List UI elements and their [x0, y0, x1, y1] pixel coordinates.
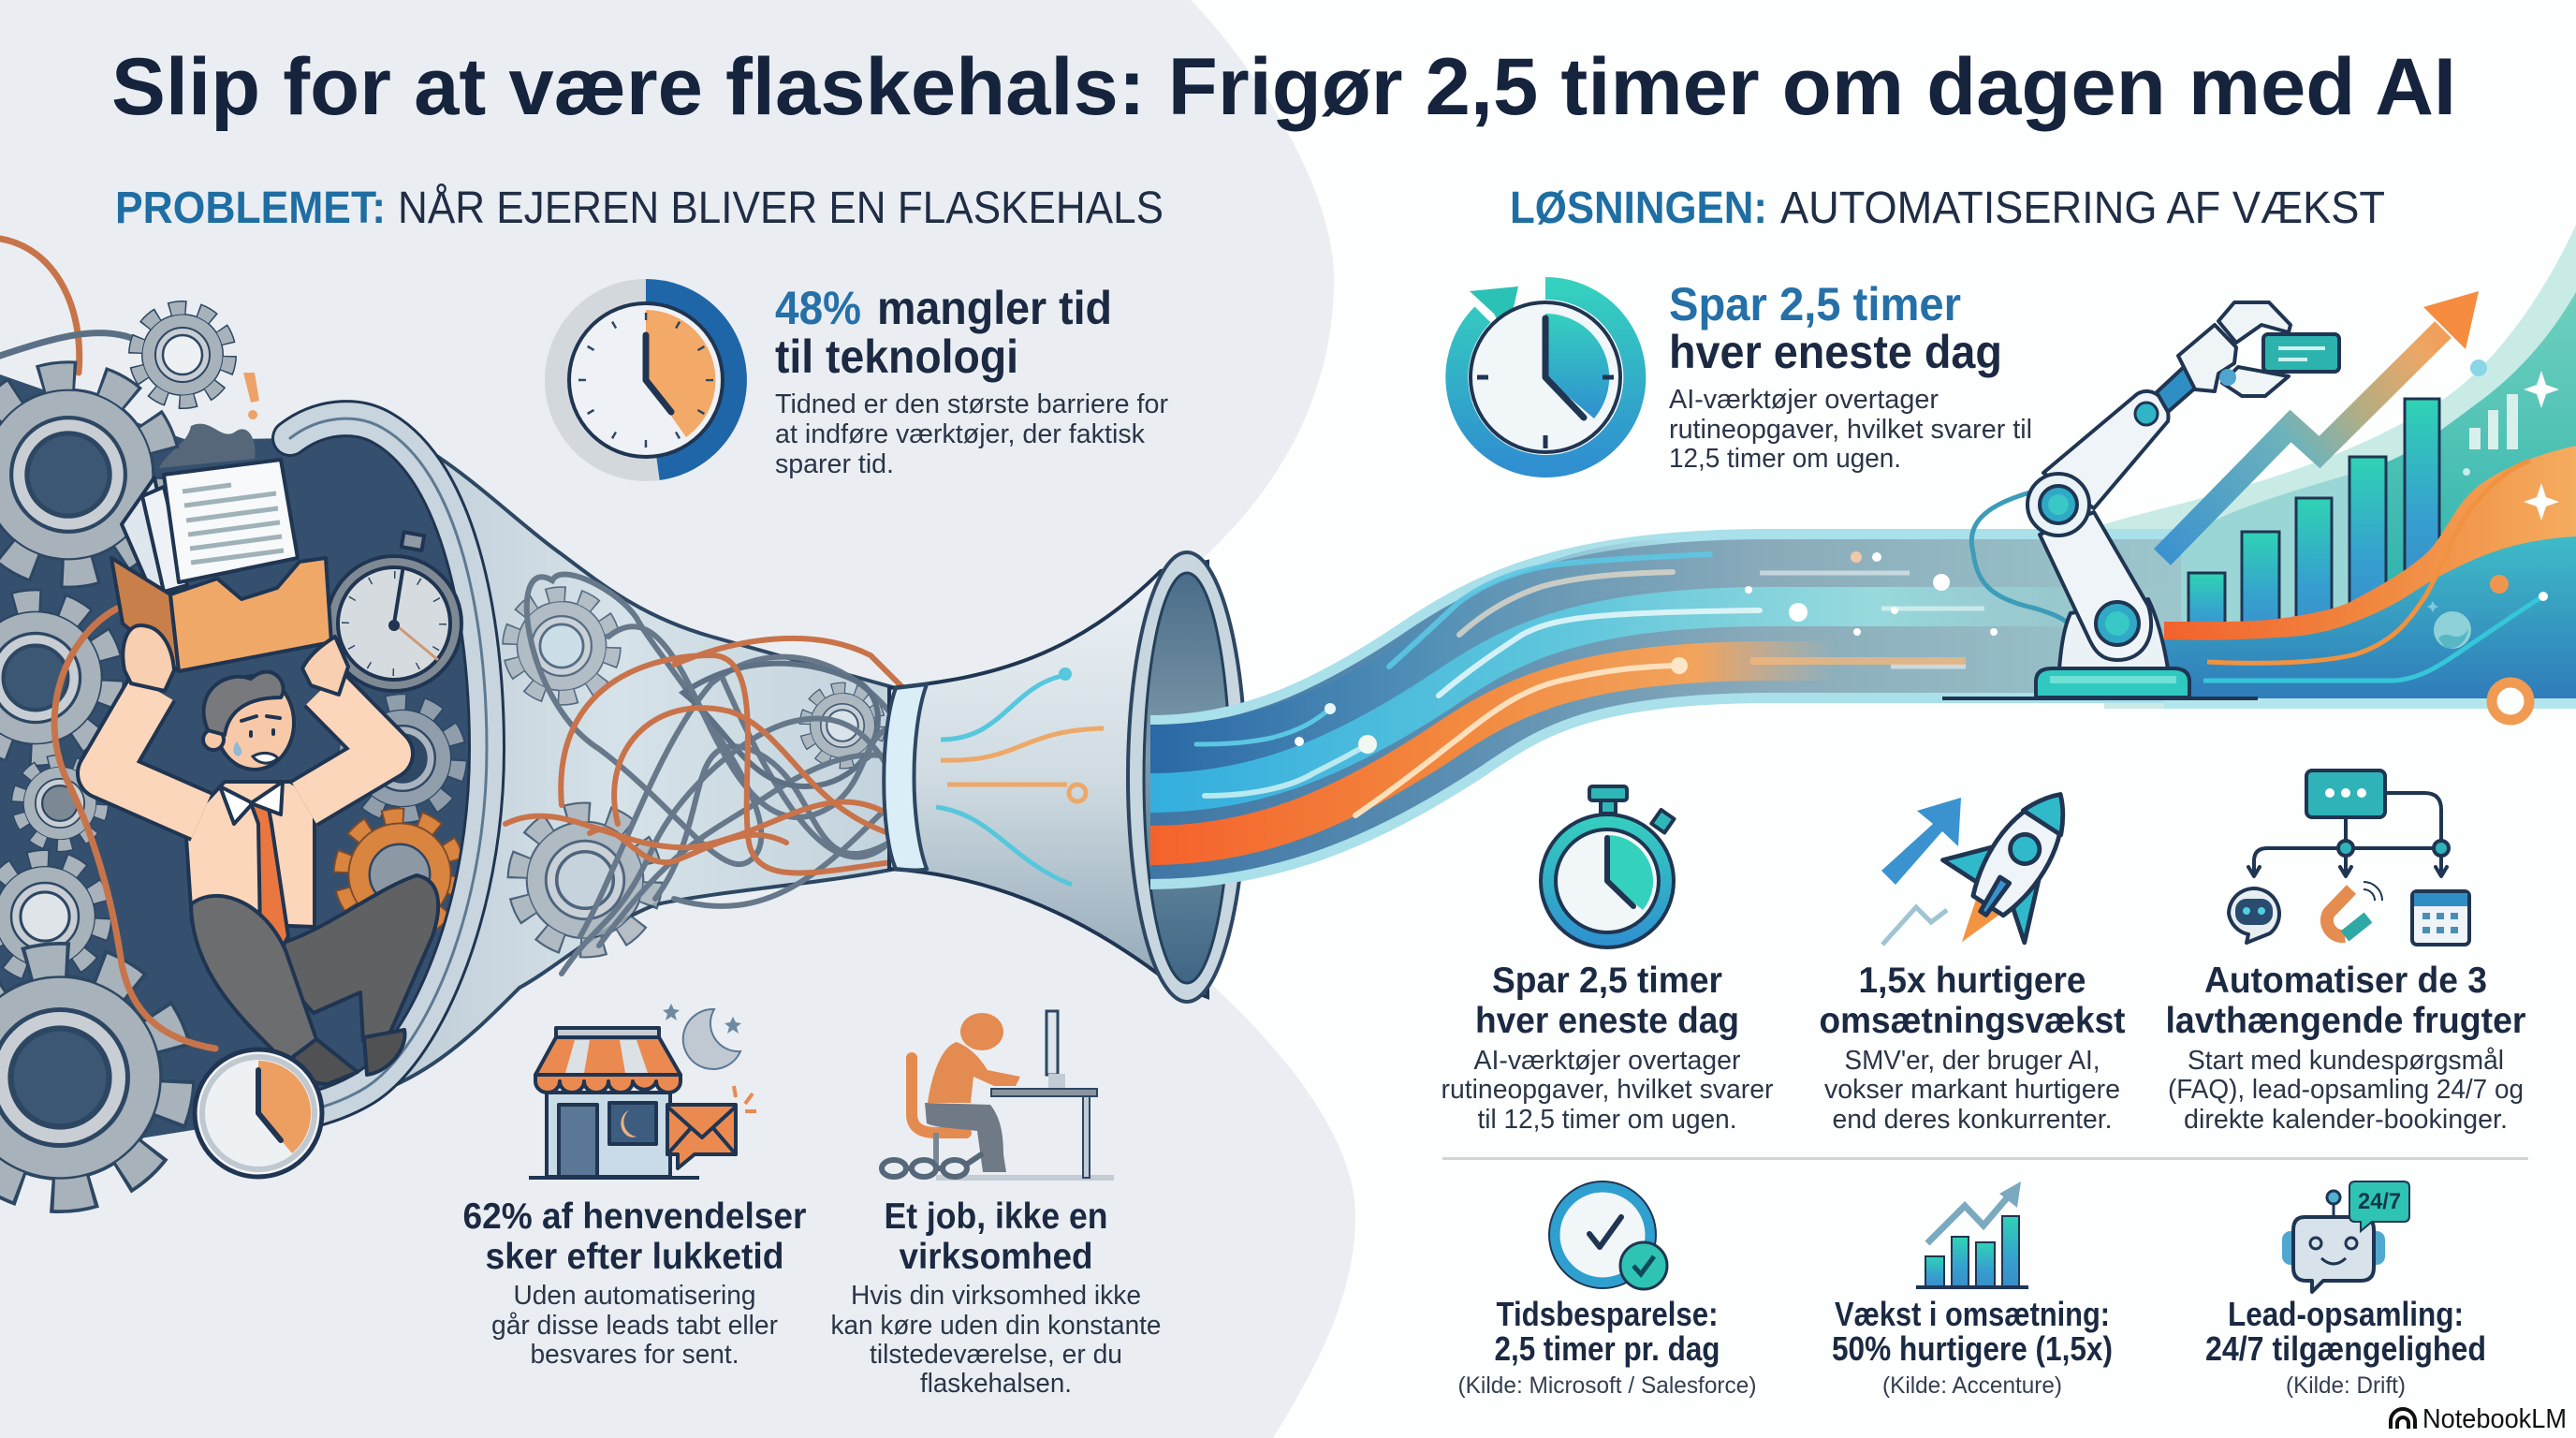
- stat text: et job: flaskehalsen.: [920, 1369, 1072, 1399]
- stat text: 62%: besvares for sent.: [530, 1340, 739, 1370]
- stat text: 62%: [462, 1196, 807, 1370]
- text: Lead-opsamling:: [2228, 1295, 2464, 1333]
- heading: solution: AUTOMATISERING AF VÆKST: [1780, 183, 2385, 233]
- stat text: save time: 12,5 timer om ugen.: [1669, 444, 1901, 474]
- ring: [2492, 682, 2529, 720]
- stat text: 48%: mangler tid: [877, 282, 1112, 334]
- gear: bottom: [0, 961, 177, 1195]
- heading: solution: LØSNINGEN:: [1510, 183, 1767, 233]
- stat text: save time: Spar 2,5 timer: [1669, 278, 1961, 330]
- text: 2,5 timer pr. dag: [1494, 1329, 1720, 1368]
- stat text: 48%: [775, 282, 1168, 479]
- papers: [122, 460, 298, 599]
- text: til 12,5 timer om ugen.: [1477, 1105, 1737, 1135]
- text: Vækst i omsætning:: [1835, 1295, 2110, 1333]
- card: automatiser: [2166, 770, 2525, 1135]
- icon: automation flow: [2229, 770, 2469, 945]
- stat: save time clock: [1456, 286, 1634, 466]
- bottom clock: [195, 1049, 322, 1177]
- text: lavthængende frugter: [2166, 1001, 2525, 1041]
- gear: in cone upper: [510, 594, 613, 697]
- torso: [185, 782, 315, 927]
- text: vokser markant hurtigere: [1824, 1075, 2120, 1105]
- stat text: save time: AI-værktøjer overtager: [1669, 385, 1939, 415]
- stream ribbon: [1150, 554, 2181, 845]
- growth arrow: [2162, 291, 2479, 557]
- text: (Kilde: Accenture): [1882, 1372, 2062, 1399]
- stat text: et job: Hvis din virksomhed ikke: [851, 1281, 1141, 1311]
- robot arm: [1942, 302, 2339, 698]
- gear: orange inside: [342, 816, 458, 932]
- text: omsætningsvækst: [1820, 1001, 2126, 1041]
- arms: [103, 688, 388, 816]
- cable: orange around man: [54, 609, 215, 1049]
- text: rutineopgaver, hvilket svarer: [1442, 1075, 1774, 1105]
- text: Spar 2,5 timer: [1492, 961, 1722, 1001]
- stat: chained worker icon: [882, 1011, 1114, 1178]
- right leg: [271, 875, 438, 1047]
- solution funnel flare: [884, 552, 1246, 1002]
- stat text: 48%: Tidned er den største barriere for: [775, 389, 1168, 419]
- gear: large upper: [0, 376, 167, 573]
- icon: clock check: [1549, 1181, 1667, 1289]
- stat text: 62%: går disse leads tabt eller: [491, 1311, 778, 1341]
- stat text: et job: kan køre uden din konstante: [831, 1311, 1161, 1341]
- gear: dark inside: [346, 702, 459, 814]
- heading: problem: PROBLEMET:: [115, 183, 386, 233]
- icon: rocket: [1881, 760, 2102, 971]
- stat text: 48%: 48%: [775, 282, 861, 334]
- text: SMV'er, der bruger AI,: [1844, 1046, 2100, 1076]
- text: end deres konkurrenter.: [1833, 1105, 2112, 1135]
- gear: in neck: [805, 688, 880, 763]
- gear: lower small: [18, 761, 102, 845]
- head: [203, 672, 294, 824]
- text: Automatiser de 3: [2204, 961, 2487, 1001]
- stat: 62% shop icon: [529, 1004, 756, 1178]
- stat text: et job: tilstedeværelse, er du: [870, 1340, 1122, 1370]
- pale strip under chart: [2164, 698, 2576, 709]
- gear: small top: [136, 308, 229, 402]
- bar chart: [2188, 399, 2439, 643]
- text: [2166, 961, 2525, 1135]
- stopwatch: [327, 532, 461, 691]
- card: hurtigere vækst: [1820, 760, 2126, 1135]
- stat text: 48%: at indføre værktøjer, der faktisk: [775, 419, 1145, 449]
- text: hver eneste dag: [1475, 1001, 1739, 1041]
- metric: vækst: [1832, 1181, 2113, 1399]
- right shoe: [364, 1030, 404, 1075]
- text: [1832, 1295, 2113, 1399]
- stat text: 48%: sparer tid.: [775, 449, 894, 479]
- icon: chatbot: [2282, 1181, 2409, 1292]
- stat text: 62%: sker efter lukketid: [485, 1237, 784, 1277]
- hands: [123, 625, 348, 695]
- panel: problem background: [0, 0, 1355, 1438]
- alert mark: [243, 373, 259, 419]
- stat text: save time: [1669, 278, 2032, 474]
- text: (Kilde: Drift): [2286, 1372, 2406, 1399]
- left leg: [191, 896, 316, 1063]
- gear: lower: [0, 858, 103, 975]
- text: AI-værktøjer overtager: [1473, 1046, 1741, 1076]
- text: [1820, 961, 2126, 1135]
- tangled cables: [505, 575, 903, 974]
- text: Tidsbesparelse:: [1496, 1295, 1719, 1333]
- front wave: [2164, 446, 2576, 698]
- growth scene back hills: [2104, 225, 2576, 709]
- left shoe: [285, 1039, 358, 1084]
- stat text: 62%: Uden automatisering: [513, 1281, 756, 1311]
- heading: problem: NÅR EJEREN BLIVER EN FLASKEHALS: [398, 183, 1164, 233]
- icon: growth bars: [1916, 1181, 2028, 1287]
- gear: in cone lower: [518, 813, 652, 947]
- text: [1442, 961, 1774, 1135]
- heading: solution: [1510, 183, 2385, 233]
- logo: NotebookLM: NotebookLM: [2422, 1404, 2567, 1434]
- title: Slip for at være flaskehals: Frigør 2,5 timer om dagen med AI: [111, 42, 2456, 132]
- text: 50% hurtigere (1,5x): [1832, 1329, 2113, 1368]
- stat text: et job: [831, 1196, 1161, 1399]
- stat text: 48%: til teknologi: [775, 330, 1018, 383]
- gear: middle: [0, 601, 112, 755]
- chart decorations: [2427, 360, 2559, 649]
- text: 1,5x hurtigere: [1859, 961, 2086, 1001]
- card: spar 2,5 timer: [1442, 786, 1774, 1135]
- metric: lead-opsamling: [2205, 1181, 2486, 1399]
- stat text: 62%: 62% af henvendelser: [462, 1196, 807, 1237]
- text: Start med kundespørgsmål: [2188, 1046, 2504, 1076]
- text: (FAQ), lead-opsamling 24/7 og: [2168, 1075, 2524, 1105]
- text: [2205, 1295, 2486, 1399]
- stat text: save time: hver eneste dag: [1669, 326, 2002, 378]
- debris near top: [159, 424, 256, 468]
- tie: [251, 803, 288, 960]
- icon: chatbot: 24/7: [2358, 1189, 2401, 1214]
- cable: top orange: [0, 239, 80, 373]
- text: direkte kalender-bookinger.: [2184, 1105, 2508, 1135]
- illustration: overwhelmed owner inside funnel: [0, 239, 903, 1195]
- folder: [111, 558, 331, 671]
- text: (Kilde: Microsoft / Salesforce): [1458, 1372, 1756, 1399]
- funnel interior: [0, 374, 487, 1161]
- cable: top grey: [0, 333, 140, 356]
- icon: stopwatch: [1541, 786, 1675, 947]
- text: 24/7 tilgængelighed: [2205, 1329, 2486, 1368]
- stat text: et job: virksomhed: [899, 1237, 1093, 1277]
- funnel cone: [337, 415, 896, 1105]
- funnel rim: [281, 418, 487, 1116]
- stat text: save time: rutineopgaver, hvilket svarer til: [1669, 415, 2032, 445]
- stream particles: [1295, 551, 1998, 754]
- heading: problem: [115, 183, 1164, 233]
- stat text: et job: Et job, ikke en: [884, 1196, 1108, 1237]
- text: [1458, 1295, 1756, 1399]
- metric: tidsbesparelse: [1458, 1181, 1756, 1399]
- stat: 48% clock: [556, 290, 736, 470]
